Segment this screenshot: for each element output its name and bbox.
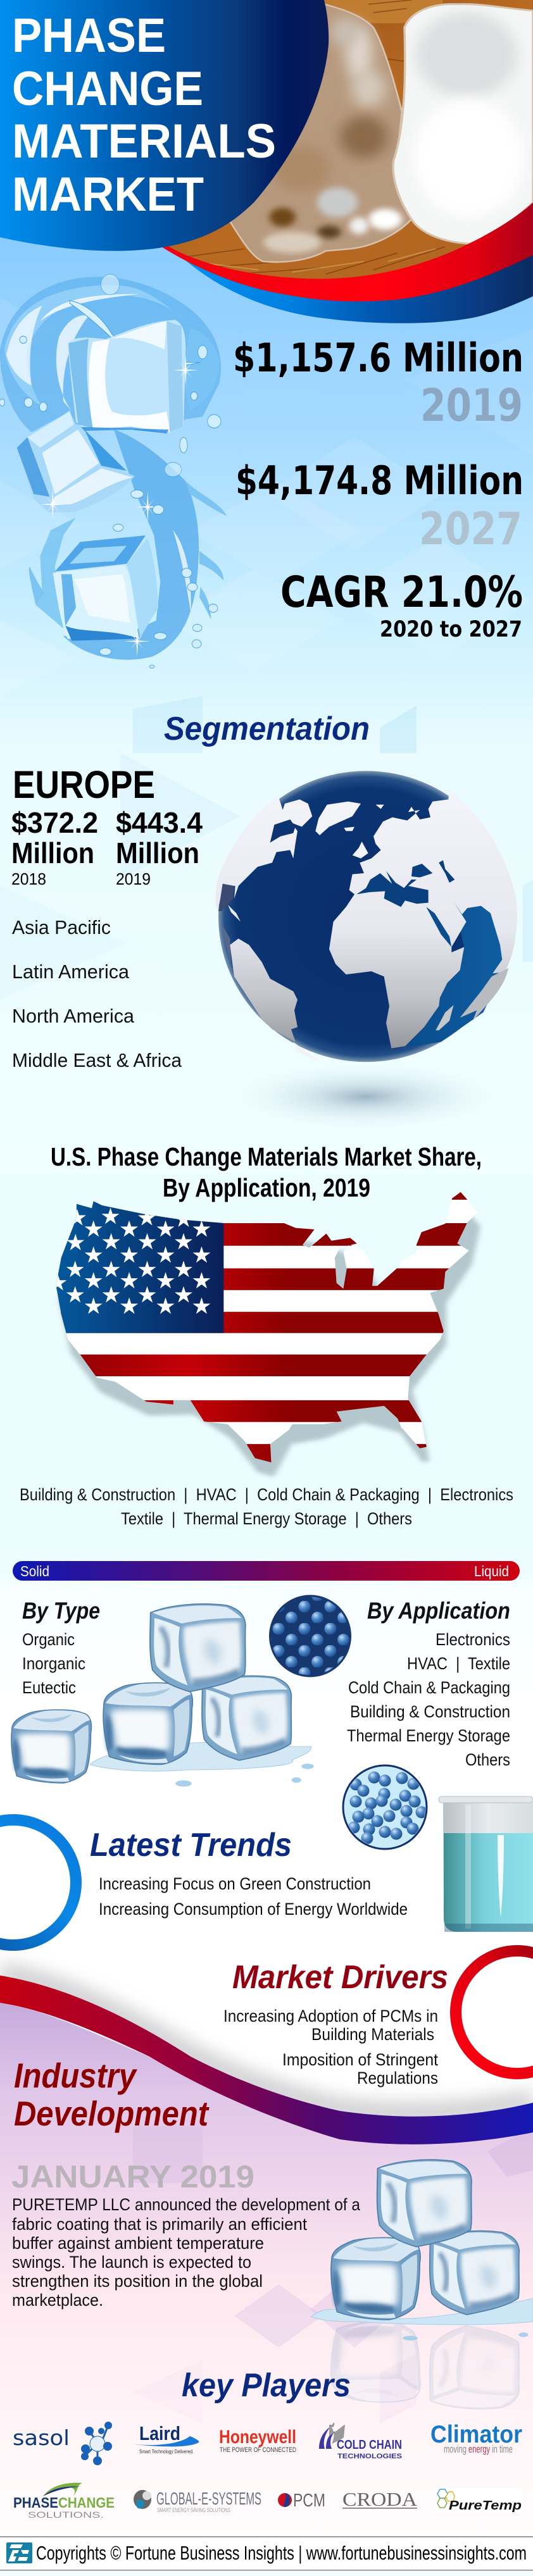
Red Sea [426,907,451,947]
icon: melting ice cubes [11,1604,314,1786]
map shadow [59,1206,480,1476]
icon: globe [216,771,517,1062]
lower lilac panel [0,2003,533,2537]
title: MATERIALS [12,115,276,168]
logo: Cold Chain Technologies: COLD CHAIN [337,2438,402,2452]
other regions list [12,916,182,1071]
development text: PURETEMP LLC announced the development of a [12,2195,361,2214]
development text: buffer against ambient temperature [12,2234,264,2253]
logo: Honeywell [219,2427,296,2454]
lilac background shapes [133,2126,533,2424]
application list under map [20,1485,513,1528]
ribbon shadow [0,1973,533,2113]
footer [0,2536,533,2576]
development text: swings. The launch is expected to [12,2253,251,2272]
development date: JANUARY 2019 [11,2159,254,2194]
logo: sasol [13,2422,112,2465]
logo: Global-E-Systems: GLOBAL-E-SYSTEMS [156,2489,261,2508]
stat: 2027 market value [235,457,524,555]
other regions list: Middle East & Africa [12,1049,182,1071]
red ribbon [158,0,533,301]
section: Market Drivers: Market Drivers [232,1959,448,1996]
land: Greenland, Iceland, Britain [315,802,384,859]
segment: By Application: HVAC | Textile [407,1654,510,1673]
seas: Mediterranean, Black, Caspian, Red [356,860,455,907]
logo: sasol: sasol [13,2425,70,2450]
logo: Climator: moving energy in time [444,2443,513,2455]
segment: By Type: Eutectic [22,1678,76,1697]
logo: Honeywell: THE POWER OF CONNECTED [220,2446,296,2454]
ring: market drivers [456,1951,533,2074]
logo: Cold Chain Technologies: TECHNOLOGIES [337,2453,402,2460]
photo: gel packs on wood [158,0,533,283]
flag fill [49,1190,483,1467]
segment: By Type [22,1598,100,1697]
region block: Europe: 2019 [116,869,151,888]
segment: By Application: Cold Chain & Packaging [348,1678,510,1697]
land: South America [230,938,298,1042]
segment: By Type: By Type [22,1598,100,1624]
heading: U.S. market share: By Application, 2019 [163,1173,370,1202]
logo: PCM [278,2491,325,2511]
Hudson Bay [270,819,296,843]
logo: Phase Change Solutions: CHANGE [58,2494,115,2511]
section: Market Drivers: Regulations [357,2069,438,2088]
other regions list: North America [12,1005,135,1027]
logo: Global-E-Systems [134,2489,261,2513]
region block: Europe [11,763,203,888]
development text: strengthen its position in the global [12,2272,263,2291]
header: blue title panel [0,0,329,251]
icon: ice cubes with reflection [311,2160,533,2409]
title: CHANGE [12,62,203,116]
background triangle pattern [0,297,533,1580]
gel pack: translucent [230,4,411,262]
indian ocean tint [405,902,514,1047]
logo: PureTemp: PureTemp [449,2499,522,2513]
segment: By Application: Thermal Energy Storage [347,1726,510,1745]
section: Latest Trends: Increasing Focus on Green Construction [99,1874,371,1893]
section: Market Drivers: Imposition of Stringent [282,2050,438,2069]
land: Madagascar [436,1005,454,1030]
solid to liquid gradient bar [13,1561,520,1581]
region block: Europe: $372.2 [11,806,98,839]
region block: Europe: EUROPE [13,763,155,806]
section: Latest Trends [90,1827,408,1919]
logo: Croda: CRODA [342,2488,418,2510]
lower water swirl [29,430,227,660]
segment: By Type: Organic [22,1630,75,1649]
development text: marketplace. [12,2291,103,2310]
water droplets [0,274,221,668]
icon: beaker of liquid [439,1796,533,1932]
section: Market Drivers [223,1959,448,2088]
heading: key Players: key Players [182,2367,351,2404]
segment: By Application: Building & Construction [350,1702,510,1721]
logo: PCM: PCM [293,2491,325,2511]
blue ribbon [158,0,533,323]
logo: Honeywell: Honeywell [219,2427,296,2448]
logo: Phase Change Solutions [13,2483,115,2520]
flag stars [49,1207,210,1314]
section heading: Industry Development [14,2056,210,2133]
logo: Phase Change Solutions: SOLUTIONS. [28,2510,104,2520]
section heading: Industry Development: Industry [14,2056,137,2095]
ice cube top [68,320,185,433]
other regions list: Asia Pacific [12,916,111,938]
solid to liquid gradient bar: Liquid [474,1563,509,1579]
segment: By Application: Electronics [436,1630,510,1649]
ice cube bottom [53,535,158,641]
globe shadow [232,1064,498,1129]
region block: Europe: Million [11,837,94,869]
logo: Laird: Smart Technology Delivered. [139,2449,194,2455]
ocean sphere [218,771,514,1062]
segment: By Application [347,1598,510,1769]
ice cube middle [17,410,135,512]
ring: latest trends [0,1820,76,1945]
logo: Cold Chain Technologies [319,2423,402,2460]
sparkles [40,355,198,657]
section heading: Industry Development: Development [14,2094,210,2133]
water ring [0,277,221,433]
icon: solid molecule sphere [269,1595,351,1677]
section: Latest Trends: Increasing Consumption of Energy Worldwide [99,1900,408,1919]
development text [12,2195,361,2310]
stat: CAGR [280,568,523,642]
heading: U.S. market share [51,1142,482,1202]
icon: liquid molecule sphere [343,1765,428,1849]
land: North America [216,797,312,911]
solid to liquid gradient bar: Solid [20,1563,49,1579]
other regions list: Latin America [12,961,130,983]
land: Eurasia and Africa [329,791,517,1048]
title: MARKET [12,168,204,221]
map: USA flag [49,1190,483,1476]
logo: Laird: Laird [139,2422,180,2444]
segment: By Application: Others [465,1750,510,1769]
application list under map: Textile | Thermal Energy Storage | Others [121,1509,412,1528]
land: Central America [222,924,231,964]
logo: Climator: Climator [430,2421,522,2448]
section: Market Drivers: Building Materials [311,2025,434,2044]
logo: Global-E-Systems: SMART ENERGY SAVING SOLUTIONS [157,2507,230,2513]
section: Market Drivers: Increasing Adoption of PCMs in [223,2007,438,2025]
segment: By Type: Inorganic [22,1654,85,1673]
stat: 2019 market value [233,335,524,432]
development text: fabric coating that is primarily an efficient [12,2215,307,2234]
gel pack: white [393,4,533,244]
icon: ice cubes in water splash [0,274,227,668]
title [12,9,276,221]
region block: Europe: 2018 [11,869,46,888]
title: PHASE [12,9,166,63]
ribbon: red to blue [0,1976,533,2144]
heading: Segmentation: Segmentation [164,711,370,747]
section: Latest Trends: Latest Trends [90,1827,292,1864]
region block: Europe: Million [116,837,199,869]
logo: PureTemp [435,2488,523,2513]
land: southeast Africa edge [460,968,508,1021]
header graphic: ribbons and photo [158,0,533,323]
region block: Europe: $443.4 [116,806,203,839]
logo: Fortune Business Insights [6,2542,32,2563]
segment: By Application: By Application [367,1598,510,1624]
Pacific patch [218,884,234,911]
logo: Phase Change Solutions: PHASE [13,2494,58,2511]
logo: Laird [135,2422,199,2455]
